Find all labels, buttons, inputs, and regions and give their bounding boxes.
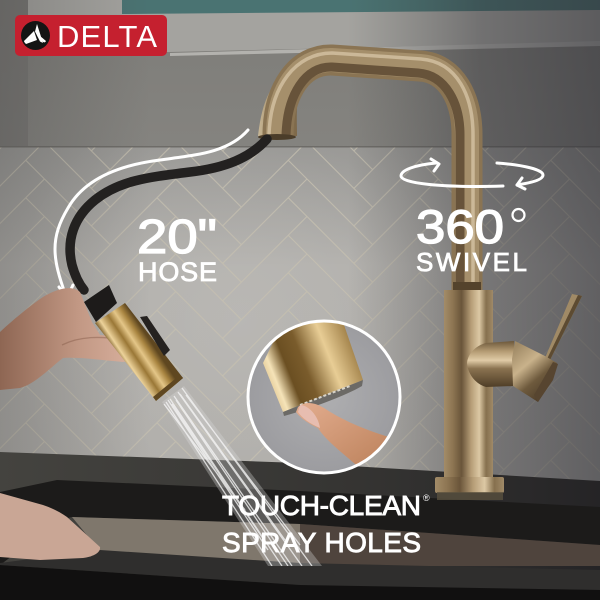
label: touch-clean spray holes: TOUCH-CLEAN xyxy=(222,490,421,521)
faucet xyxy=(258,53,582,500)
sink dark front edge xyxy=(0,480,600,565)
nozzle spray face xyxy=(283,380,363,416)
nozzle close-up xyxy=(263,322,363,412)
spout tip flare xyxy=(258,88,298,136)
label: touch-clean spray holes: ® xyxy=(423,493,430,503)
sprayer black collar xyxy=(84,285,117,322)
fingernail xyxy=(298,405,320,428)
black braided hose xyxy=(70,139,267,290)
hand holding sprayer xyxy=(0,288,142,390)
finger xyxy=(296,403,387,464)
sprayer button xyxy=(140,316,170,356)
faucet base ring xyxy=(435,477,504,493)
sprayer gold body xyxy=(95,303,183,401)
label: touch-clean spray holes xyxy=(222,490,430,558)
handle cap xyxy=(512,341,557,402)
shelf band xyxy=(28,0,600,52)
Delta logo xyxy=(15,15,167,56)
sink basin xyxy=(72,517,300,566)
curved length arrow xyxy=(55,130,248,298)
handle hub xyxy=(467,341,514,387)
handle lever xyxy=(545,294,582,360)
inset circle: touch-clean spray holes xyxy=(248,321,400,473)
pull-down sprayer xyxy=(84,285,183,401)
label: 20 inch hose: 20" xyxy=(137,211,217,264)
swivel rotation arrows xyxy=(401,159,543,189)
label: 20 inch hose: HOSE xyxy=(138,257,217,287)
label: 360 degree swivel xyxy=(416,200,527,277)
faucet stem collar xyxy=(453,282,481,290)
sprayer nozzle rim xyxy=(153,375,183,401)
logo emblem xyxy=(21,21,50,50)
faucet spout arm xyxy=(269,53,473,292)
faucet body xyxy=(444,290,493,480)
logo wordmark: DELTA xyxy=(57,19,157,54)
counter top surface xyxy=(0,452,600,600)
label: 360 degree swivel: 360 xyxy=(416,200,504,253)
window view xyxy=(122,0,600,14)
counter near edge xyxy=(0,550,600,590)
spout outlet xyxy=(258,134,296,140)
kitchen counter and sink xyxy=(0,452,600,600)
label: 20 inch hose xyxy=(137,211,217,287)
label: 360 degree swivel: SWIVEL xyxy=(416,247,527,277)
herringbone backsplash xyxy=(0,147,600,487)
lower hand on sink xyxy=(0,493,100,560)
label: touch-clean spray holes: SPRAY HOLES xyxy=(222,527,421,558)
water spray xyxy=(162,386,322,566)
